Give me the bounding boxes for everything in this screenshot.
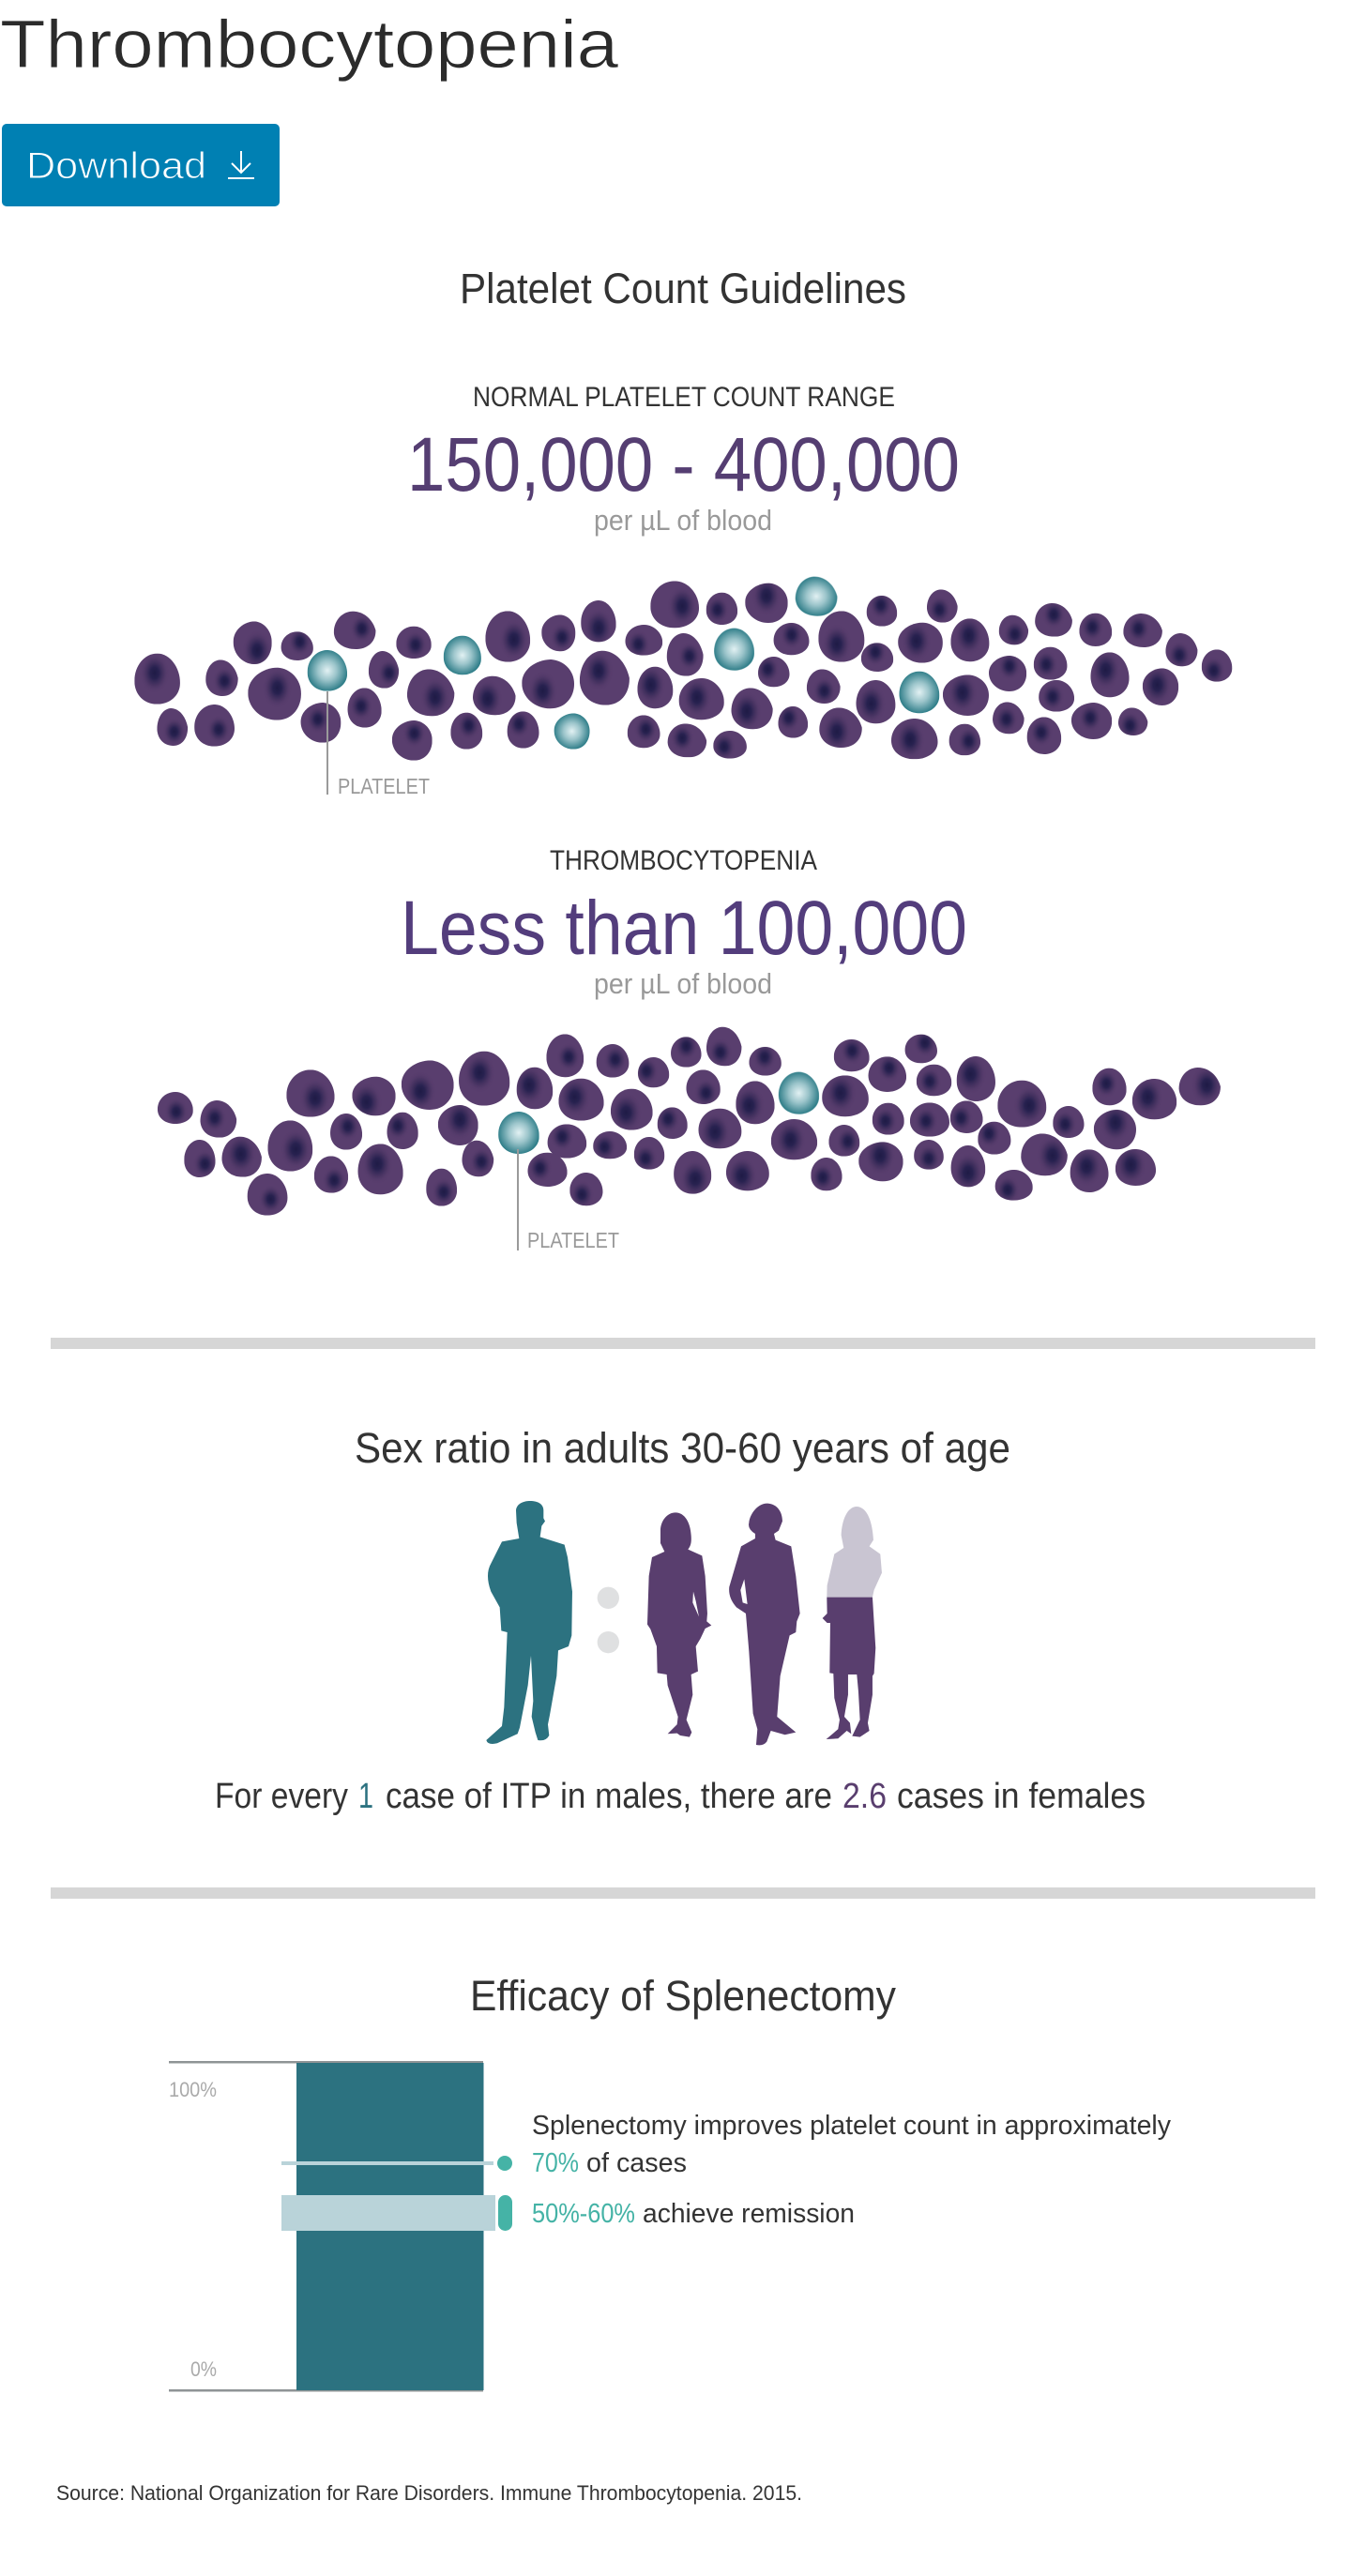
text: sex ratio statement: 1 <box>358 1777 373 1816</box>
bar <box>296 2063 484 2390</box>
unit: thrombocytopenia: per µL of blood <box>594 967 772 1000</box>
text: 70% statement: 70% <box>532 2148 579 2178</box>
text: 70% statement <box>532 2111 1171 2178</box>
text: sex ratio statement: For every <box>215 1777 348 1816</box>
text: remission statement <box>532 2199 855 2229</box>
chart: efficacy bar <box>169 2061 512 2392</box>
icon: man <box>486 1501 572 1744</box>
icon: download arrow <box>228 151 254 178</box>
download button <box>2 124 280 206</box>
label: platelet (normal): PLATELET <box>338 774 430 798</box>
number: thrombocytopenia value: Less than 100,000 <box>401 886 967 971</box>
icon: partial woman (0.6) <box>823 1507 882 1739</box>
pointer line: platelet (thrombocytopenia) <box>517 1149 519 1250</box>
label: thrombocytopenia: THROMBOCYTOPENIA <box>550 845 817 876</box>
silhouettes: one man to 2.6 women <box>486 1501 882 1745</box>
text: sex ratio statement: cases in females <box>897 1777 1146 1816</box>
text: remission statement: 50%-60% <box>532 2199 635 2229</box>
download button: Download <box>26 145 206 187</box>
text: remission statement: achieve remission <box>643 2199 855 2229</box>
text: sex ratio statement <box>215 1777 1146 1816</box>
panel: efficacy of splenectomy <box>169 1972 1171 2392</box>
heading: sex ratio: Sex ratio in adults 30-60 years of age <box>355 1424 1010 1472</box>
title: Thrombocytopenia <box>0 8 619 83</box>
marker: 50-60% band <box>281 2195 512 2231</box>
pointer line: platelet (normal) <box>326 691 328 795</box>
number: normal range value: 150,000 - 400,000 <box>407 422 960 508</box>
icon: woman 1 <box>647 1512 711 1737</box>
axis label: 0%: 0% <box>190 2357 217 2381</box>
text: sex ratio statement: 2.6 <box>842 1777 887 1816</box>
panel: platelet count guidelines <box>134 265 1232 1252</box>
source note: Source: National Organization for Rare Disorders. Immune Thrombocytopenia. 2015. <box>56 2481 802 2505</box>
icon: woman 2 <box>729 1504 800 1745</box>
heading: platelet count guidelines: Platelet Count Guidelines <box>460 265 906 312</box>
text: 70% statement: Splenectomy improves platelet count in approximately <box>532 2111 1171 2141</box>
marker: 70% <box>281 2156 512 2171</box>
text: 70% statement: of cases <box>586 2148 687 2178</box>
icon: ratio colon <box>598 1587 619 1653</box>
label: normal range: NORMAL PLATELET COUNT RANGE <box>473 382 895 413</box>
heading: efficacy of splenectomy: Efficacy of Splenectomy <box>470 1972 896 2020</box>
cell field: thrombocytopenia <box>158 1027 1222 1216</box>
label: platelet (thrombocytopenia): PLATELET <box>527 1228 619 1252</box>
panel: sex ratio <box>215 1424 1146 1816</box>
cell field: normal platelet count <box>134 576 1232 761</box>
text: sex ratio statement: case of ITP in males, there are <box>386 1777 832 1816</box>
unit: normal range: per µL of blood <box>594 504 772 537</box>
axis label: 100%: 100% <box>169 2078 217 2101</box>
